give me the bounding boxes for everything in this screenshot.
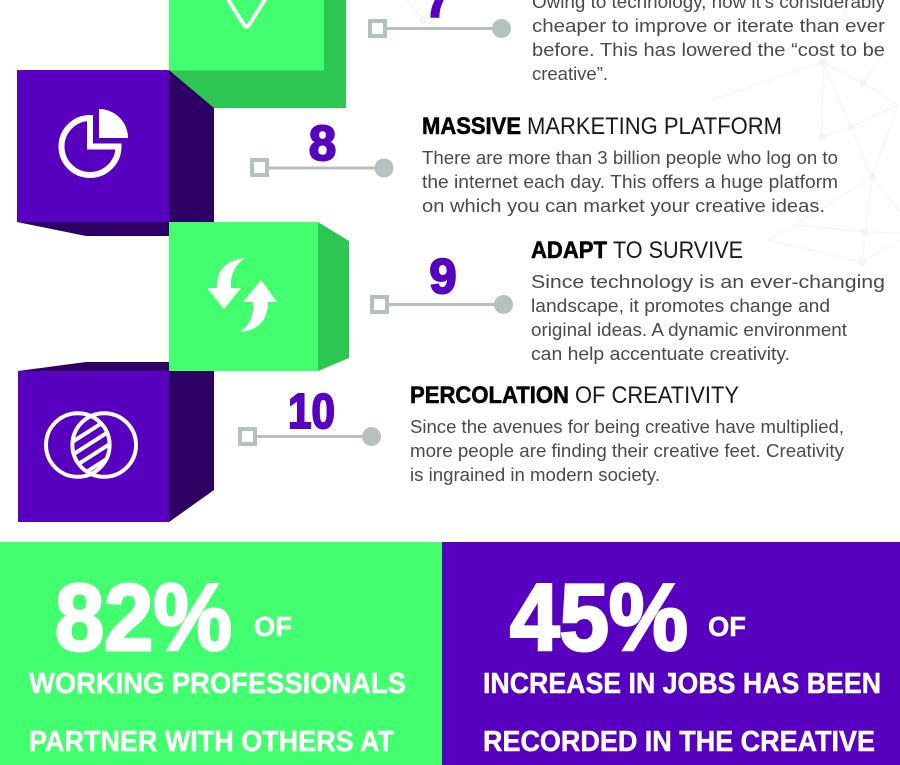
stat description <box>29 668 406 758</box>
heading 10: PERCOLATION <box>410 382 569 409</box>
text block 7: cheaper to improve or iterate than ever <box>532 16 885 36</box>
icon: pie chart <box>61 109 128 175</box>
text block 9: can help accentuate creativity. <box>531 344 790 364</box>
stat description: RECORDED IN THE CREATIVE <box>483 726 875 758</box>
cube 7: green <box>169 0 346 108</box>
text block 10: is ingrained in modern society. <box>410 465 660 485</box>
stat number: 82% <box>55 565 232 671</box>
text block 9 <box>531 272 885 364</box>
cube 8: purple <box>17 70 214 236</box>
connector 9 <box>372 295 513 314</box>
heading 9: TO SURVIVE <box>613 237 743 264</box>
icon: venn diagram <box>44 411 138 479</box>
cube 10: purple <box>18 362 214 522</box>
text block 10: more people are finding their creative feet. Creativity <box>410 441 844 461</box>
heading 8 <box>422 113 782 140</box>
heading 9: ADAPT <box>531 237 607 264</box>
panel: 82% stat <box>0 542 442 765</box>
number 9: 9 <box>429 250 457 304</box>
stat description: PARTNER WITH OTHERS AT <box>29 726 394 758</box>
panel: 45% stat <box>442 542 900 765</box>
heading 10: OF CREATIVITY <box>575 382 739 409</box>
text block 8: on which you can market your creative ideas. <box>422 196 825 216</box>
icon: refresh arrows <box>207 258 277 332</box>
text block 8 <box>422 148 838 216</box>
text block 8: There are more than 3 billion people who log on to <box>422 148 838 168</box>
text block 7 <box>532 0 885 84</box>
text block 8: the internet each day. This offers a huge platform <box>422 172 838 192</box>
connector 10 <box>240 427 381 446</box>
text block 10: Since the avenues for being creative have multiplied, <box>410 417 844 437</box>
stat number: 45% <box>510 565 688 671</box>
number 10: 10 <box>288 385 335 439</box>
heading 10 <box>410 382 739 409</box>
text block 7: before. This has lowered the “cost to be <box>532 40 885 60</box>
heading 8: MASSIVE <box>422 113 521 140</box>
stat description: WORKING PROFESSIONALS <box>29 668 406 700</box>
stat of: OF <box>254 611 292 642</box>
connector 8 <box>252 158 394 178</box>
stat description <box>483 668 881 758</box>
number 8: 8 <box>309 117 336 171</box>
stat of: OF <box>708 611 746 642</box>
heading 9 <box>531 237 743 264</box>
text block 9: original ideas. A dynamic environment <box>531 320 847 340</box>
background network pattern <box>407 0 900 266</box>
cube 9: green <box>169 222 349 371</box>
heading 8: MARKETING PLATFORM <box>527 113 782 140</box>
icon: triangle <box>227 0 266 26</box>
text block 7: creative”. <box>532 64 608 84</box>
text block 9: landscape, it promotes change and <box>531 296 830 316</box>
text block 10 <box>410 417 844 485</box>
text block 9: Since technology is an ever-changing <box>531 272 885 292</box>
connector 7 <box>370 19 511 38</box>
